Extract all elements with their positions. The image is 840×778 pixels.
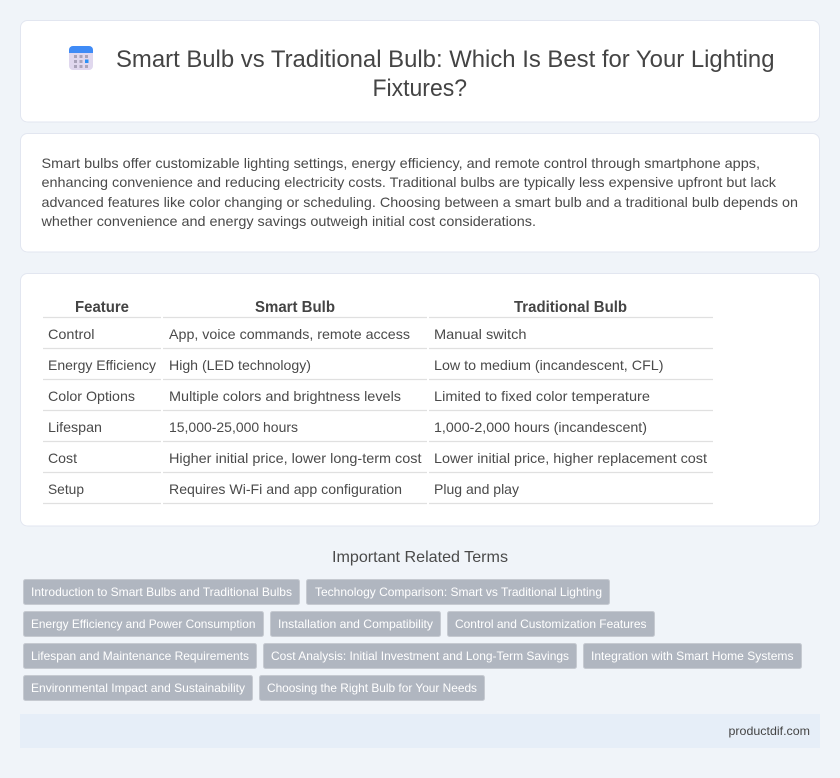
table row: color options: Limited to fixed color temperature — [434, 388, 650, 404]
table row: cost: Lower initial price, higher replacement cost — [434, 450, 707, 466]
title — [116, 46, 774, 102]
table row: energy efficiency: Energy Efficiency — [48, 357, 156, 373]
tag — [24, 644, 256, 668]
table row: cost: Cost — [48, 450, 77, 466]
text block: introduction paragraph: Smart bulbs offer customizable lighting settings, energy efficiency, and remote control through smartphone apps, — [42, 155, 760, 171]
table row: color options: Color Options — [48, 388, 135, 404]
table header row — [43, 299, 713, 318]
panel: header — [20, 20, 820, 122]
tag group: related terms — [24, 580, 802, 700]
tag: Cost Analysis: Initial Investment and Long-Term Savings — [271, 649, 569, 663]
icon: calendar — [69, 46, 93, 70]
tag — [306, 580, 610, 604]
tag — [264, 644, 576, 668]
table row: lifespan: 15,000-25,000 hours — [169, 419, 298, 435]
footer bar — [20, 714, 820, 748]
text block: introduction paragraph: advanced features like color changing or scheduling. Choosing between a smart bulb and a traditional bulb depends on — [42, 194, 798, 210]
table row: cost: Higher initial price, lower long-term cost — [169, 450, 422, 466]
table row: control: Control — [48, 326, 94, 342]
text block: introduction paragraph — [40, 155, 798, 229]
table header row: Traditional Bulb — [514, 299, 627, 316]
table row: lifespan: Lifespan — [48, 419, 102, 435]
table header row: Smart Bulb — [255, 299, 335, 316]
text block: introduction paragraph: whether convenience and energy savings outweigh initial cost considerations. — [40, 213, 536, 229]
tag — [260, 676, 484, 700]
footer source text: productdif.com — [728, 724, 810, 738]
panel: introduction — [20, 134, 820, 252]
tag: Lifespan and Maintenance Requirements — [31, 649, 249, 663]
tag — [448, 612, 654, 636]
table row: control — [43, 326, 713, 348]
tag: Integration with Smart Home Systems — [591, 649, 794, 663]
table row: setup — [43, 481, 713, 504]
tag: Installation and Compatibility — [278, 617, 433, 631]
tag: Environmental Impact and Sustainability — [31, 681, 245, 695]
table row: control: Manual switch — [434, 326, 526, 342]
tag: Technology Comparison: Smart vs Traditional Lighting — [315, 585, 602, 599]
panel: comparison table — [20, 274, 820, 526]
tag — [584, 644, 802, 668]
table row: control: App, voice commands, remote access — [169, 326, 410, 342]
table row: setup: Requires Wi-Fi and app configuration — [169, 481, 402, 497]
title: Fixtures? — [372, 75, 467, 102]
table row: energy efficiency: High (LED technology) — [169, 357, 311, 373]
text block: introduction paragraph: enhancing convenience and reducing electricity costs. Traditional bulbs are typically less expensive upfront but lack — [42, 174, 777, 190]
table row: energy efficiency: Low to medium (incandescent, CFL) — [434, 357, 664, 373]
title: Smart Bulb vs Traditional Bulb: Which Is Best for Your Lighting — [116, 46, 774, 73]
tag: Control and Customization Features — [455, 617, 646, 631]
tag — [24, 580, 300, 604]
tag: Choosing the Right Bulb for Your Needs — [267, 681, 477, 695]
tag: Introduction to Smart Bulbs and Traditional Bulbs — [31, 585, 292, 599]
table row: color options: Multiple colors and brightness levels — [169, 388, 401, 404]
heading: important related terms: Important Related Terms — [332, 549, 508, 566]
tag: Energy Efficiency and Power Consumption — [31, 617, 256, 631]
table row: color options — [43, 388, 713, 410]
table row: cost — [43, 450, 713, 472]
tag — [270, 612, 440, 636]
table row: lifespan — [43, 419, 713, 442]
tag — [24, 612, 264, 636]
table row: setup: Setup — [48, 481, 84, 497]
tag — [24, 676, 252, 700]
table row: lifespan: 1,000-2,000 hours (incandescent) — [434, 419, 647, 435]
table row: energy efficiency — [43, 357, 713, 380]
table row: setup: Plug and play — [434, 481, 519, 497]
table header row: Feature — [75, 299, 129, 316]
